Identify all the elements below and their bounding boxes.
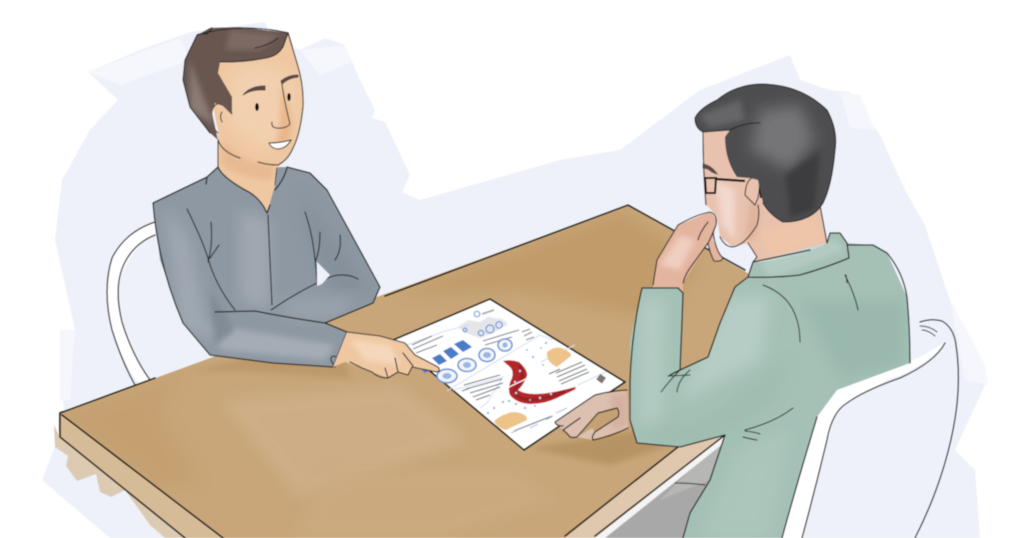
man right: face and neck: [703, 130, 827, 262]
man left: pointing hand: [333, 332, 440, 378]
man right: face outlines: [703, 132, 827, 262]
man right: shirt: [630, 233, 910, 538]
man right: hair: [695, 84, 836, 222]
paper: orange cell bottom: [487, 399, 536, 430]
paper: logo: [474, 310, 494, 317]
table: [54, 205, 760, 538]
paper: blue square icons: [418, 340, 472, 373]
man left: neck and face: [212, 33, 303, 213]
paper: text block right: [549, 362, 589, 384]
man right: eyebrow: [703, 164, 717, 174]
man left: shirt: [153, 167, 380, 367]
man right: shirt outlines: [630, 233, 910, 538]
man left: shirt outlines: [153, 167, 380, 367]
man left: brows, eyes, nose, mouth: [243, 75, 298, 95]
table: front right edge: [565, 435, 725, 538]
paper: blood vessel: [503, 360, 576, 404]
man right: ear: [745, 177, 759, 205]
paper: text block left: [462, 375, 503, 400]
chair: left man: [107, 222, 155, 388]
man left: ear: [212, 104, 232, 133]
paper: ring icons: [437, 339, 512, 383]
table: outlines: [60, 205, 745, 538]
man left: arm gap: [317, 262, 330, 286]
man right: glasses: [705, 178, 761, 198]
chair: right man: [782, 319, 959, 538]
grey floor area under table: [595, 436, 725, 538]
man left: hair: [183, 27, 288, 140]
paper: legend: [511, 408, 567, 433]
man left: face outlines: [218, 33, 303, 185]
paper: map markers: [463, 322, 502, 336]
table: top: [60, 205, 760, 538]
man right: hand on paper: [555, 390, 628, 440]
paper: world map: [458, 317, 508, 338]
table: wash blotches beyond the side edge: [54, 425, 185, 538]
table: side edge: [60, 413, 223, 538]
paper: panel frames: [407, 325, 606, 408]
paper: orange cell top right: [522, 342, 571, 371]
paper: QR code: [596, 374, 606, 384]
man right: hand at chin: [653, 212, 723, 293]
paper: title text lines: [412, 329, 534, 353]
paper: infographic on table: [393, 299, 625, 450]
